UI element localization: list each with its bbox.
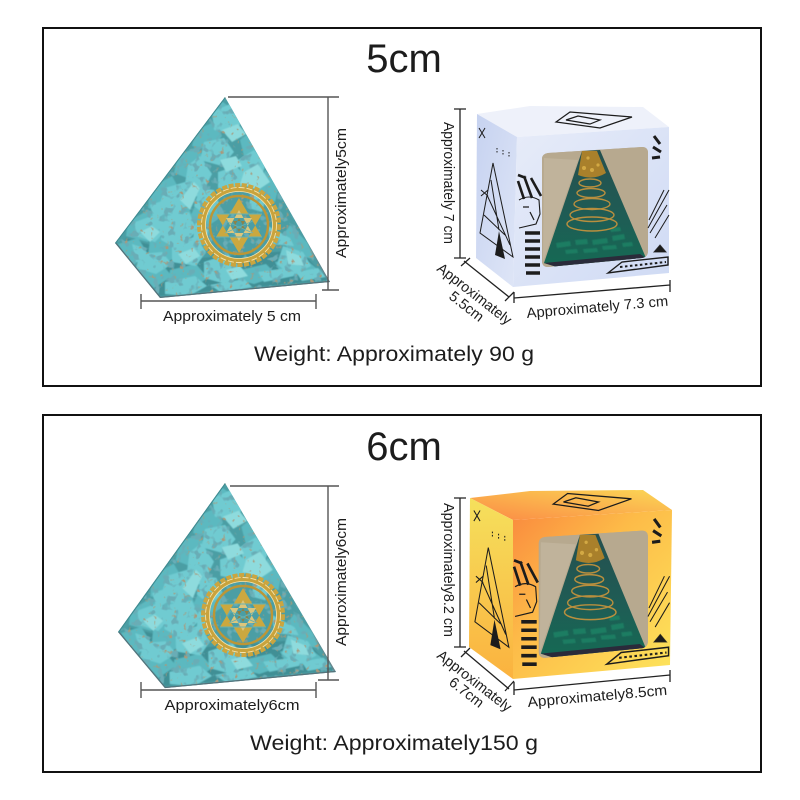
dimension: box height: Approximately 7 cm <box>440 122 457 244</box>
dimension: pyramid height: Approximately5cm <box>334 128 350 258</box>
dimension: box height <box>440 109 466 258</box>
dimension: box depth: 5.5cm <box>446 289 487 325</box>
dimension: pyramid width <box>141 682 316 714</box>
heading: 6cm: 6cm <box>366 425 442 469</box>
dimension: pyramid height <box>230 486 350 680</box>
dimension: pyramid height: Approximately6cm <box>334 518 350 646</box>
dimension: box width <box>514 280 670 322</box>
image: blue gift box <box>476 106 669 287</box>
image: turquoise orgonite pyramid 5cm <box>110 90 336 305</box>
image: turquoise orgonite pyramid 6cm <box>109 476 343 695</box>
dimension: box height <box>440 498 466 647</box>
dimension: box depth: Approximately <box>434 648 515 716</box>
image: orange gift box <box>469 490 672 679</box>
dimension: pyramid width: Approximately6cm <box>164 698 300 714</box>
dimension: box width: Approximately 7.3 cm <box>526 294 669 322</box>
dimension: pyramid height <box>228 97 350 290</box>
panel: 6cm size <box>43 415 761 772</box>
heading: 5cm: 5cm <box>366 37 442 81</box>
dimension: pyramid width <box>141 294 316 325</box>
panel: 5cm size <box>43 28 761 386</box>
dimension: box width: Approximately8.5cm <box>527 683 668 711</box>
weight text: Weight: Approximately150 g <box>250 731 538 755</box>
dimension: box depth: Approximately <box>434 261 515 329</box>
dimension: pyramid width: Approximately 5 cm <box>163 309 301 325</box>
dimension: box depth: 6.7cm <box>446 675 487 711</box>
weight text: Weight: Approximately 90 g <box>254 342 534 366</box>
dimension: box width <box>514 670 670 711</box>
dimension: box height: Approximately8.2 cm <box>440 503 457 637</box>
